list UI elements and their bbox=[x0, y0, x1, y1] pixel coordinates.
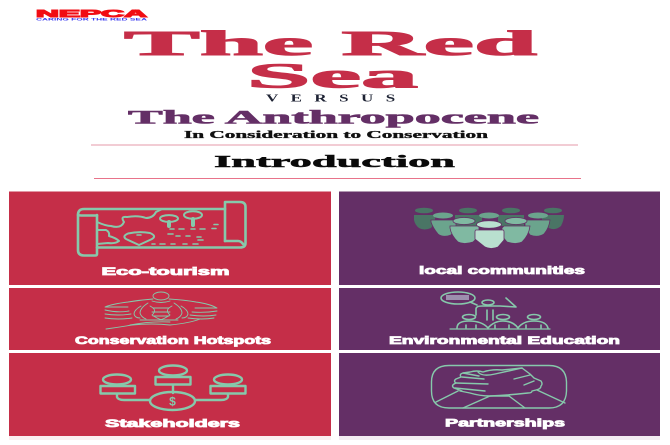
label: local communities: local communities bbox=[419, 265, 585, 277]
label: Environmental Education: Environmental Education bbox=[389, 335, 620, 347]
label: Stakeholders: Stakeholders bbox=[105, 418, 240, 430]
title: The Red Sea: Sea bbox=[247, 56, 418, 96]
logo: NEPCA: NEPCA bbox=[36, 8, 148, 20]
icon: stakeholders network bbox=[100, 366, 246, 410]
icon: teacher and students bbox=[441, 292, 550, 329]
icon: clasped hands bbox=[432, 366, 566, 408]
icon: map bbox=[78, 202, 246, 256]
panel: eco-tourism bbox=[9, 192, 331, 285]
icon: group of people bbox=[414, 208, 564, 248]
panel: stakeholders bbox=[9, 353, 331, 436]
label: Eco-tourism: Eco-tourism bbox=[102, 266, 230, 278]
panel: partnerships bbox=[339, 353, 660, 436]
panel: environmental education bbox=[339, 288, 660, 350]
subtitle: versus: VERSUS bbox=[266, 94, 395, 104]
icon: turtle in hand bbox=[105, 292, 217, 329]
label: Partnerships: Partnerships bbox=[445, 418, 565, 430]
heading: The Anthropocene: The Anthropocene bbox=[128, 108, 539, 128]
panel: conservation hotspots bbox=[9, 288, 331, 350]
subheading: In Consideration to Conservation bbox=[184, 130, 489, 141]
title: The Red Sea: The Red bbox=[124, 24, 539, 63]
title: The Red Sea bbox=[124, 24, 539, 96]
icon: stakeholders network: $ bbox=[169, 394, 176, 408]
logo: NEPCA bbox=[36, 8, 148, 22]
label: Conservation Hotspots: Conservation Hotspots bbox=[75, 335, 271, 347]
logo: NEPCA: CARING FOR THE RED SEA bbox=[36, 18, 148, 22]
panel: local communities bbox=[339, 192, 660, 285]
section heading: Introduction: Introduction bbox=[214, 152, 456, 171]
